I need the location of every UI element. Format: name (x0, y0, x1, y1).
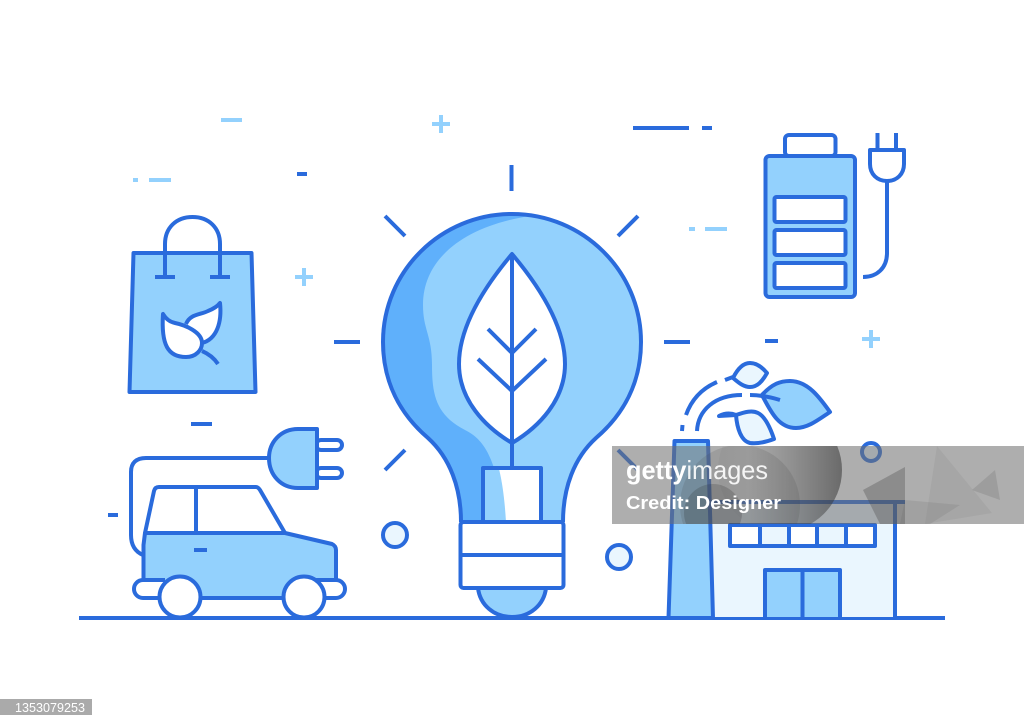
image id tag: 1353079253 (15, 701, 85, 715)
car dashes (108, 424, 212, 515)
factory windows (730, 525, 875, 546)
charging cable (131, 458, 268, 555)
watermark band (612, 446, 1024, 524)
battery cells (774, 197, 846, 288)
small circles (383, 443, 880, 569)
icon: battery with plug (766, 133, 904, 297)
icon: smoke turning into leaves (682, 363, 830, 443)
smoke curves (682, 377, 780, 431)
watermark credit: Credit: Designer (626, 493, 781, 513)
wheels (160, 576, 200, 618)
bag leaf (163, 303, 220, 364)
decorative background marks (133, 115, 880, 348)
icon: shopping bag (130, 217, 256, 392)
factory door (765, 570, 840, 618)
plug (269, 429, 342, 488)
watermark logo: gettyimages (626, 455, 768, 485)
lower leaf (736, 412, 774, 443)
bulb glass (383, 214, 641, 522)
car door handle (194, 548, 207, 552)
screw base (460, 522, 564, 617)
icon: electric car (131, 429, 345, 618)
icon: light bulb with leaf (383, 214, 641, 617)
bulb outline (383, 214, 641, 522)
bulb highlight (423, 216, 641, 522)
car body (144, 533, 336, 597)
leaf inside bulb (459, 254, 565, 468)
bulb stem box (483, 468, 541, 522)
top leaf (733, 363, 767, 387)
ground line (79, 616, 945, 620)
bulb rays (334, 165, 690, 470)
factory building (712, 502, 895, 617)
icon: factory (668, 441, 905, 618)
chimney (668, 441, 713, 617)
car windows (145, 487, 285, 533)
bumper (134, 580, 345, 598)
image id tag (0, 699, 92, 715)
battery plug (863, 133, 904, 277)
large leaf (762, 381, 830, 428)
